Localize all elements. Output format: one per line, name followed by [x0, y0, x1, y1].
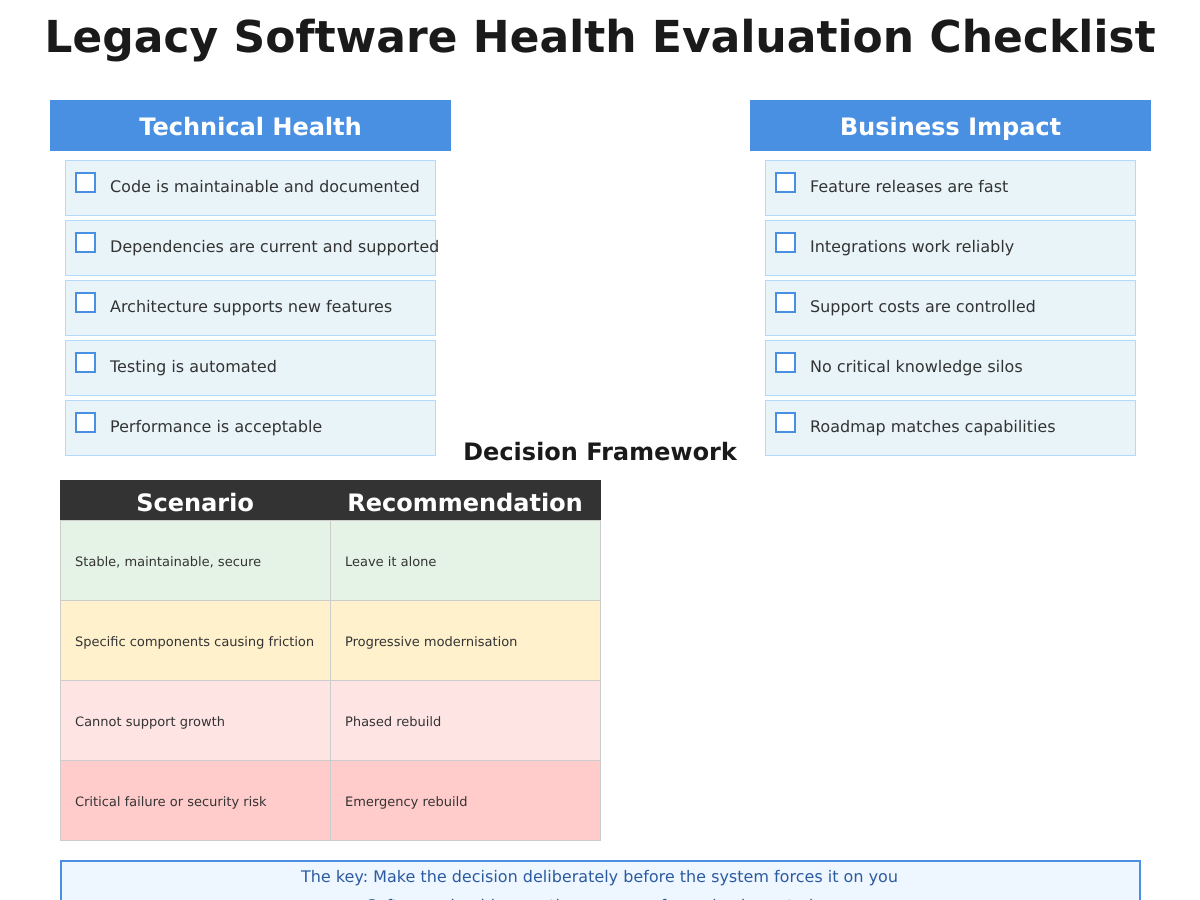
table header [60, 480, 601, 520]
heading: technical health [50, 100, 451, 151]
checklist item: dependencies: Dependencies are current and supported [110, 237, 439, 256]
scenario cell [60, 680, 331, 761]
heading: technical health: Technical Health [139, 113, 362, 141]
checklist item: performance [65, 400, 436, 456]
row: stable [60, 520, 601, 600]
checklist item: performance: Performance is acceptable [110, 417, 322, 436]
row: critical [60, 761, 601, 841]
recommendation cell [330, 600, 601, 681]
panel: technical health [50, 100, 451, 456]
checklist item: testing [65, 340, 436, 396]
panel: business impact [750, 100, 1151, 456]
recommendation cell: Leave it alone [345, 555, 436, 570]
table: decision framework [60, 480, 601, 841]
checklist item: testing: Testing is automated [110, 357, 277, 376]
checklist item: code: Code is maintainable and documented [110, 177, 420, 196]
checklist item: architecture [65, 280, 436, 336]
scenario cell: Critical failure or security risk [75, 795, 267, 810]
scenario cell [60, 760, 331, 841]
checklist item: roadmap: Roadmap matches capabilities [810, 417, 1056, 436]
heading: business impact [750, 100, 1151, 151]
recommendation cell: Phased rebuild [345, 715, 441, 730]
recommendation cell: Emergency rebuild [345, 795, 467, 810]
checklist item: support costs: Support costs are controlled [810, 297, 1036, 316]
recommendation cell [330, 680, 601, 761]
scenario cell [60, 600, 331, 681]
row: friction [60, 601, 601, 680]
checklist item: integrations [765, 220, 1136, 276]
column heading: scenario: Scenario [136, 489, 254, 517]
checklist item: knowledge silos: No critical knowledge silos [810, 357, 1023, 376]
title: Legacy Software Health Evaluation Checklist [44, 12, 1156, 63]
scenario cell [60, 520, 331, 601]
checklist item: integrations: Integrations work reliably [810, 237, 1014, 256]
scenario cell: Cannot support growth [75, 715, 225, 730]
heading: business impact: Business Impact [840, 113, 1061, 141]
column heading: recommendation: Recommendation [347, 489, 583, 517]
checklist item: code [65, 160, 436, 216]
checklist item: dependencies [65, 220, 436, 276]
checklist item: architecture: Architecture supports new features [110, 297, 392, 316]
checklist item: roadmap [765, 400, 1136, 456]
scenario cell: Specific components causing friction [75, 635, 314, 650]
heading: decision framework: Decision Framework [463, 438, 737, 466]
recommendation cell: Progressive modernisation [345, 635, 517, 650]
callout: the key [60, 860, 1141, 900]
checklist item: releases: Feature releases are fast [810, 177, 1008, 196]
row: growth [60, 681, 601, 760]
recommendation cell [330, 760, 601, 841]
checklist item: support costs [765, 280, 1136, 336]
checklist item: releases [765, 160, 1136, 216]
recommendation cell [330, 520, 601, 601]
scenario cell: Stable, maintainable, secure [75, 555, 261, 570]
checklist item: knowledge silos [765, 340, 1136, 396]
callout line 1: The key: Make the decision deliberately before the system forces it on you [301, 867, 898, 886]
